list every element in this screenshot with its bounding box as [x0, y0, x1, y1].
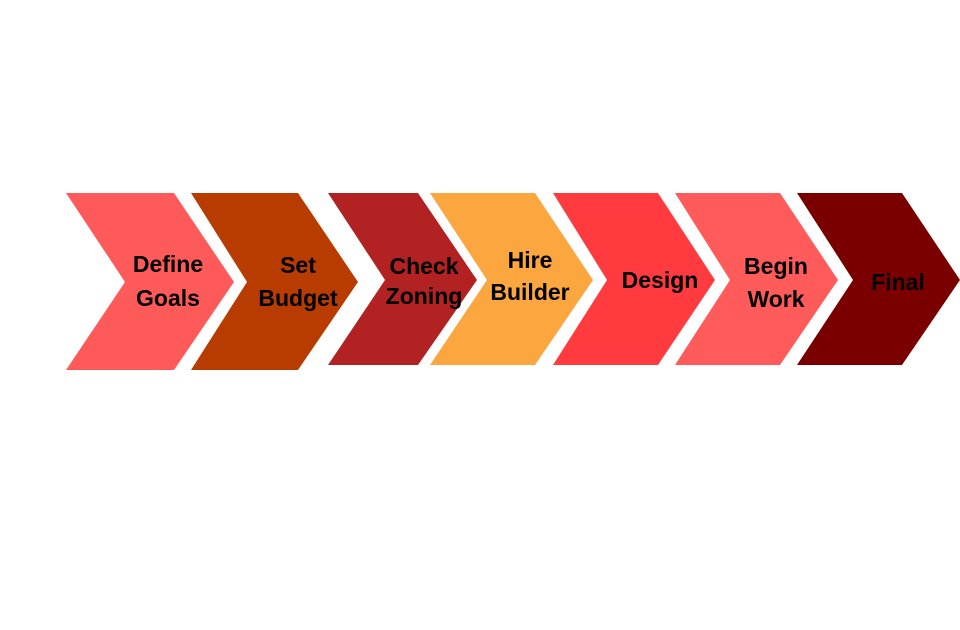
step 1: Define Goals — [66, 193, 234, 370]
step 1: Define Goals: Goals — [136, 285, 200, 311]
step 6: Begin Work: Work — [747, 286, 805, 312]
step 4: Hire Builder — [430, 193, 593, 365]
step 7: Final — [797, 193, 960, 365]
step 4: Hire Builder: Builder — [490, 279, 570, 305]
step 3: Check Zoning — [328, 193, 477, 365]
step 7: Final: Final — [871, 269, 925, 295]
step 1: Define Goals: Define — [133, 251, 203, 277]
step 2: Set Budget: Set — [280, 252, 316, 278]
step 3: Check Zoning: Check — [389, 253, 459, 279]
step 6: Begin Work: Begin — [744, 253, 808, 279]
step 4: Hire Builder: Hire — [508, 247, 552, 273]
step 2: Set Budget — [191, 193, 358, 370]
step 2: Set Budget: Budget — [258, 285, 338, 311]
step 5: Design: Design — [622, 267, 698, 293]
step 6: Begin Work — [675, 193, 838, 365]
step 3: Check Zoning: Zoning — [386, 283, 462, 309]
step 5: Design — [553, 193, 715, 365]
